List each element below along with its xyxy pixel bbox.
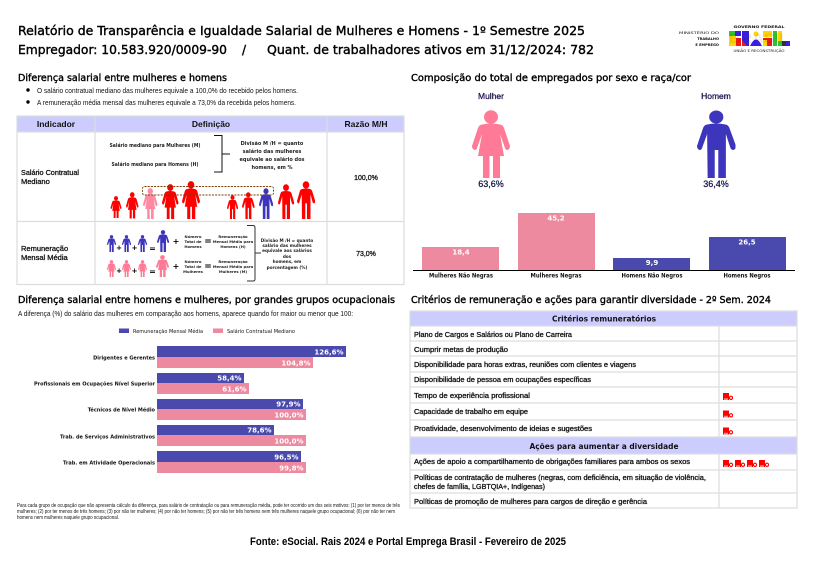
- legenda: Salário Contratual Mediano: [227, 328, 296, 335]
- subtítulo: A diferença (%) do salário das mulheres em comparação aos homens, aparece quando for maior ou menor que 100:: [18, 309, 353, 318]
- logo: Ministério do Trabalho e Governo Federal: E EMPREGO: [695, 43, 719, 47]
- definição: remuneração média: Mulheres: [183, 269, 204, 274]
- gráfico de barras: grupos ocupacionais: [34, 346, 346, 473]
- nota de rodapé: Para cada grupo de ocupação que não apresenta cálculo da diferença, para salário de contratação ou para remuneração média, pode ter ocorrido um dos seis motivos: (1) por ter menos de três: [17, 503, 400, 509]
- gráfico de colunas: raça/cor: 9,9: [646, 259, 658, 267]
- panel: tabela indicador: 73,0%: [356, 251, 376, 258]
- gráfico de colunas: raça/cor: Homens Negros: [724, 272, 771, 280]
- panel: tabela indicador: Definição: [192, 119, 230, 129]
- panel: tabela indicador: Salário Contratual: [21, 168, 79, 177]
- definição: remuneração média: Mensal Média para: [213, 239, 254, 244]
- definição: remuneração média: [107, 226, 313, 281]
- definição: remuneração média: Total de: [184, 264, 202, 269]
- panel: tabela critérios: Disponibilidade de pessoa em ocupações específicas: [414, 377, 592, 384]
- definição: salário mediano: Salário mediano para Homens (H): [112, 161, 198, 168]
- definição: remuneração média: =: [204, 262, 212, 272]
- definição: remuneração média: Mensal Média para: [213, 264, 254, 269]
- gráfico de barras: grupos ocupacionais: Técnicos de Nível Médio: [88, 406, 156, 414]
- panel: tabela critérios: Proatividade, desenvolvimento de ideias e sugestões: [414, 426, 593, 433]
- heading: grupos ocupacionais: Diferença salarial entre homens e mulheres, por grandes grupos ocupacionais: [18, 295, 395, 306]
- gráfico de barras: grupos ocupacionais: 58,4%: [217, 374, 242, 382]
- gráfico de barras: grupos ocupacionais: Trab. de Serviços Administrativos: [60, 434, 155, 440]
- definição: remuneração média: Remuneração: [218, 234, 248, 239]
- gráfico de barras: grupos ocupacionais: Dirigentes e Gerentes: [93, 356, 155, 362]
- definição: salário mediano: Salário mediano para Mulheres (M): [110, 142, 200, 149]
- panel: tabela indicador: Razão M/H: [345, 119, 387, 129]
- gráfico de colunas: raça/cor: Mulheres Negras: [530, 272, 582, 280]
- gráfico de barras: grupos ocupacionais: 78,6%: [247, 426, 272, 434]
- definição: remuneração média: +: [173, 237, 179, 246]
- panel: tabela indicador: Mediano: [21, 177, 50, 186]
- definição: remuneração média: +: [116, 267, 122, 275]
- panel: tabela critérios: Plano de Cargos e Salários ou Plano de Carreira: [414, 332, 572, 339]
- panel: tabela indicador: Indicador: [37, 119, 76, 129]
- heading: diferença salarial entre mulheres e homens: Diferença salarial entre mulheres e homens: [18, 73, 227, 84]
- gráfico de barras: grupos ocupacionais: 96,5%: [274, 454, 298, 462]
- nota de rodapé: mulheres; (2) por ter menos de três homens; (3) por não ter mulheres; (4) por não ter homens; (5) por não ter três homens nem três mulheres naquele grupo ocupacional; (6) por não ter nem: [17, 509, 395, 515]
- pictograma: mulher: Mulher: [478, 91, 504, 101]
- panel: tabela critérios: [410, 311, 797, 508]
- logo: Ministério do Trabalho e Governo Federal: BRASIL: [729, 30, 789, 46]
- title: [18, 24, 594, 57]
- definição: remuneração média: dos: [283, 254, 292, 259]
- panel: tabela critérios: Tempo de experiência profissional: [414, 393, 530, 400]
- gráfico de colunas: raça/cor: 45,2: [547, 214, 565, 222]
- definição: salário mediano: equivale ao salário dos: [239, 156, 305, 163]
- panel: tabela indicador: Remuneração: [21, 244, 68, 253]
- panel: tabela critérios: Ações para aumentar a diversidade: [530, 442, 679, 451]
- pictograma: homem: Homem: [701, 91, 731, 101]
- definição: remuneração média: Remuneração: [218, 259, 248, 264]
- gráfico de barras: grupos ocupacionais: 61,6%: [222, 386, 246, 394]
- title: /: [242, 43, 247, 57]
- definição: remuneração média: =: [204, 237, 212, 247]
- logo: Ministério do Trabalho e Governo Federal: GOVERNO FEDERAL: [734, 24, 785, 29]
- bullet list: A remuneração média mensal das mulheres equivale a 73,0% da recebida pelos homens.: [37, 98, 296, 107]
- title: Empregador: 10.583.920/0009-90: [18, 43, 227, 57]
- gráfico de colunas: raça/cor: 26,5: [738, 238, 756, 246]
- definição: remuneração média: homens, em: [273, 259, 302, 264]
- pictograma: mulher: 63,6%: [478, 179, 504, 189]
- definição: salário mediano: Divisão M /H = quanto: [241, 141, 304, 147]
- panel: tabela critérios: chefes de família, LGBTQIA+, Indígenas): [414, 484, 545, 491]
- gráfico de barras: grupos ocupacionais: 99,8%: [279, 464, 304, 472]
- definição: remuneração média: +: [132, 267, 138, 275]
- gráfico de colunas: raça/cor: Homens Não Negros: [622, 272, 683, 280]
- panel: tabela indicador: Mensal Média: [21, 253, 69, 262]
- definição: remuneração média: Homens: [184, 244, 202, 249]
- panel: tabela indicador: 100,0%: [354, 175, 378, 182]
- gráfico de colunas: raça/cor: 18,4: [452, 248, 470, 256]
- panel: tabela critérios: Políticas de promoção de mulheres para cargos de direção e gerência: [414, 499, 647, 506]
- heading: composição: Composição do total de empregados por sexo e raça/cor: [411, 73, 691, 84]
- bullet list: O salário contratual mediano das mulheres equivale a 100,0% do recebido pelos homens.: [37, 86, 298, 95]
- definição: remuneração média: porcentagem (%): [267, 265, 307, 270]
- title: Quant. de trabalhadores ativos em 31/12/2024: 782: [267, 43, 594, 57]
- gráfico de colunas: raça/cor: Mulheres Não Negras: [429, 272, 493, 280]
- panel: tabela critérios: Ações de apoio a compartilhamento de obrigações familiares para ambos os sexos: [414, 459, 691, 466]
- nota de rodapé: [17, 503, 400, 521]
- title: Relatório de Transparência e Igualdade Salarial de Mulheres e Homens - 1º Semestre 2025: [18, 24, 585, 38]
- definição: remuneração média: +: [173, 262, 179, 271]
- panel: tabela critérios: Políticas de contratação de mulheres (negras, com deficiência, em situação de violência,: [414, 475, 706, 482]
- definição: remuneração média: Total de: [184, 239, 202, 244]
- gráfico de barras: grupos ocupacionais: 100,0%: [274, 412, 304, 420]
- definição: remuneração média: salário das mulheres: [262, 243, 312, 248]
- pictograma: homem: [697, 91, 736, 189]
- panel: tabela critérios: Capacidade de trabalho em equipe: [414, 409, 528, 416]
- legenda: [119, 328, 296, 335]
- gráfico de barras: grupos ocupacionais: Trab. em Atividade Operacionais: [63, 460, 155, 466]
- logo: Ministério do Trabalho e Governo Federal: [679, 24, 790, 53]
- definição: salário mediano: salário das mulheres: [243, 148, 301, 155]
- definição: remuneração média: Número: [185, 259, 202, 264]
- definição: remuneração média: Mulheres (M): [219, 269, 247, 274]
- logo: Ministério do Trabalho e Governo Federal: MINISTÉRIO DO: [679, 30, 719, 35]
- definição: salário mediano: [110, 136, 305, 172]
- definição: remuneração média: =: [149, 244, 156, 253]
- logo: Ministério do Trabalho e Governo Federal: UNIÃO E RECONSTRUÇÃO: [734, 48, 785, 53]
- heading: critérios: Critérios de remuneração e ações para garantir diversidade - 2º Sem. 2024: [411, 295, 771, 306]
- panel: tabela critérios: Cumprir metas de produção: [414, 347, 508, 354]
- panel: tabela indicador: [17, 116, 404, 284]
- gráfico de colunas: raça/cor: [413, 213, 795, 280]
- definição: remuneração média: +: [132, 244, 138, 252]
- gráfico de barras: grupos ocupacionais: Profissionais em Ocupações Nível Superior: [34, 380, 156, 388]
- ícones de empresas: [723, 393, 769, 467]
- pictograma: mulher: [472, 91, 510, 189]
- definição: remuneração média: Número: [185, 234, 202, 239]
- definição: remuneração média: =: [149, 267, 156, 276]
- pictograma: homem: 36,4%: [703, 179, 729, 189]
- definição: remuneração média: Divisão M /H = quanto: [261, 238, 313, 243]
- gráfico de barras: grupos ocupacionais: 100,0%: [274, 438, 304, 446]
- panel: tabela critérios: Critérios remuneratórios: [552, 314, 656, 324]
- definição: remuneração média: Homens (H): [220, 244, 246, 249]
- logo: Ministério do Trabalho e Governo Federal: TRABALHO: [697, 37, 719, 41]
- bullet list: [26, 86, 298, 107]
- definição: remuneração média: +: [116, 244, 122, 252]
- pictograma: mediana: [110, 181, 315, 219]
- gráfico de barras: grupos ocupacionais: 126,6%: [314, 348, 344, 356]
- nota de rodapé: homens nem mulheres naquele grupo ocupacional.: [17, 515, 119, 521]
- definição: salário mediano: homens, em %: [251, 165, 293, 171]
- gráfico de barras: grupos ocupacionais: 104,8%: [281, 360, 310, 368]
- definição: remuneração média: equivale aos salários: [262, 248, 312, 253]
- panel: tabela critérios: Disponibilidade para horas extras, reuniões com clientes e viagens: [414, 362, 637, 369]
- fonte: Fonte: eSocial. Rais 2024 e Portal Emprega Brasil - Fevereiro de 2025: [250, 536, 566, 548]
- legenda: Remuneração Mensal Média: [133, 328, 203, 335]
- gráfico de barras: grupos ocupacionais: 97,9%: [276, 400, 300, 408]
